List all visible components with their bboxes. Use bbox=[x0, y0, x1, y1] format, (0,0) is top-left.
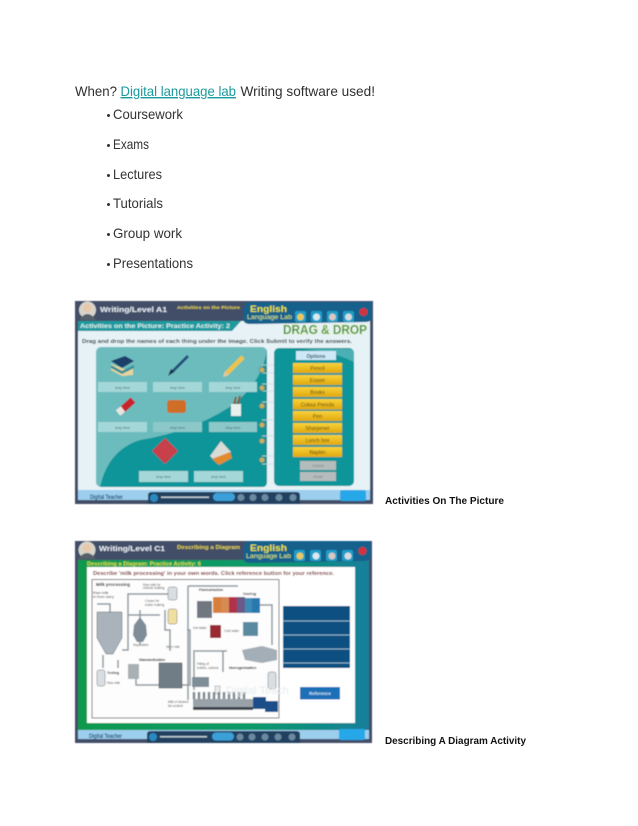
milk processing diagram: in from dairy bbox=[93, 595, 114, 599]
header: writing level C1 bbox=[78, 542, 241, 559]
options panel bbox=[274, 348, 354, 486]
icon: pen bbox=[168, 356, 188, 376]
milk processing diagram: Cooling bbox=[243, 592, 256, 596]
footer player bar bbox=[75, 490, 373, 504]
header: writing level A1: Writing/Level A1 bbox=[100, 305, 167, 314]
options panel: Reset bbox=[313, 475, 323, 479]
reference button: Reference bbox=[309, 691, 331, 696]
bullet list: Tutorials bbox=[113, 195, 163, 211]
milk processing diagram: Raw milk for bbox=[143, 583, 161, 587]
footer player bar bbox=[75, 729, 372, 743]
activity title bar: Activities on the Picture: Practice Activity: 2 bbox=[80, 324, 231, 330]
milk processing diagram: Cold water bbox=[224, 629, 240, 633]
reference button bbox=[300, 687, 340, 700]
milk bottles bbox=[97, 587, 276, 689]
icon: books bbox=[111, 356, 134, 376]
heading line bbox=[75, 83, 375, 99]
picture panel bbox=[96, 347, 267, 487]
icon: colour pencils bbox=[231, 396, 241, 416]
milk processing diagram: Standardization bbox=[139, 658, 165, 662]
options panel: Pen bbox=[313, 414, 322, 420]
pasteurisation units bbox=[197, 601, 212, 618]
milk processing diagram: Homogenisation bbox=[229, 666, 256, 670]
bullet list: Presentations bbox=[113, 255, 193, 271]
activity title: Describing a Diagram: Practice Activity: 6 bbox=[87, 562, 201, 568]
milk processing diagram: Separation bbox=[133, 643, 149, 647]
footer player bar: Digital Teacher bbox=[90, 495, 124, 501]
milk processing diagram: Testing bbox=[107, 671, 119, 675]
milk processing diagram: butter making bbox=[145, 603, 165, 607]
options panel: Lunch box bbox=[306, 438, 330, 444]
watermark: Digital Teach bbox=[226, 685, 289, 697]
options panel: Options bbox=[307, 354, 326, 360]
milk processing diagram: Cream for bbox=[145, 599, 160, 603]
header: writing level C1: Writing/Level C1 bbox=[99, 544, 165, 553]
answer text box bbox=[283, 606, 350, 668]
pipes bbox=[97, 586, 272, 700]
milk processing diagram: Pasteurisation bbox=[199, 588, 223, 592]
options panel: Pencil bbox=[310, 366, 325, 372]
green activity frame bbox=[78, 560, 369, 731]
drop boxes: drop here bbox=[115, 426, 130, 430]
white work area bbox=[87, 567, 355, 723]
caption: describing a diagram: Describing A Diagram Activity bbox=[385, 735, 526, 747]
standardization units bbox=[128, 664, 139, 679]
instruction: Drag and drop the names of each thing under the image. Click Submit to verify the answers. bbox=[82, 339, 352, 345]
drop boxes: drop here bbox=[170, 426, 185, 430]
milk processing diagram: cheese making bbox=[143, 586, 165, 590]
bullet list: Exams bbox=[113, 136, 149, 152]
holding tank bbox=[97, 612, 122, 654]
milk processing diagram: Hot water bbox=[193, 626, 208, 630]
heading line: Digital language lab bbox=[120, 83, 236, 99]
options panel: Books bbox=[310, 390, 325, 396]
screenshot: describing a diagram bbox=[75, 541, 372, 743]
bullet list: Group work bbox=[113, 225, 183, 241]
english language lab logo: Language Lab bbox=[246, 553, 291, 560]
bullet list bbox=[107, 106, 193, 271]
header: writing level C1: Describing a Diagram bbox=[177, 545, 241, 551]
separator bbox=[133, 617, 147, 642]
english language lab logo: English bbox=[250, 543, 287, 554]
english language lab logo bbox=[243, 302, 372, 324]
binder rings bbox=[259, 365, 281, 464]
packaging conveyor bbox=[193, 692, 253, 710]
header: writing level A1: Activities on the Picture bbox=[177, 305, 241, 310]
options panel: Eraser bbox=[310, 378, 325, 384]
bullet list: Lectures bbox=[113, 166, 162, 182]
english language lab logo bbox=[243, 541, 371, 563]
options panel: Submit bbox=[313, 464, 323, 468]
drop boxes: drop here bbox=[226, 386, 241, 390]
drop boxes: drop here bbox=[226, 426, 241, 430]
homogenisation machine bbox=[242, 646, 277, 663]
milk processing diagram: Skim milk bbox=[166, 645, 180, 649]
milk processing diagram: Milk processing bbox=[96, 582, 130, 587]
milk processing diagram: Raw milk bbox=[107, 681, 120, 685]
milk processing diagram: Raw milk bbox=[93, 591, 109, 595]
drop boxes: drop here bbox=[170, 386, 185, 390]
drop boxes: drop here bbox=[211, 475, 226, 479]
instruction: Describe 'milk processing' in your own words. Click reference button for your reference. bbox=[93, 571, 334, 577]
milk processing diagram: Milk of desired bbox=[168, 700, 189, 704]
header: writing level A1 bbox=[79, 302, 241, 320]
options panel: Napkin bbox=[309, 450, 326, 456]
milk processing diagram: fat content bbox=[168, 704, 183, 708]
milk processing diagram bbox=[92, 580, 279, 718]
english language lab logo: Language Lab bbox=[247, 314, 292, 321]
options panel: Sharpener bbox=[305, 426, 330, 432]
caption: activities on the picture: Activities On The Picture bbox=[385, 495, 504, 507]
icon: pencil bbox=[223, 357, 243, 377]
drop boxes: drop here bbox=[115, 386, 130, 390]
milk processing diagram: bottles, cartons bbox=[197, 666, 219, 670]
english language lab logo: English bbox=[250, 304, 287, 315]
heading line: Writing software used! bbox=[240, 83, 375, 99]
options panel: Colour Pencils bbox=[301, 402, 335, 408]
footer player bar: Digital Teacher bbox=[89, 734, 123, 740]
drop boxes: drop here bbox=[156, 475, 171, 479]
drop boxes bbox=[98, 382, 257, 482]
icon: napkin bbox=[152, 438, 178, 464]
filling machine bbox=[192, 677, 209, 687]
milk processing diagram: Filling of bbox=[197, 662, 209, 666]
icon: lunch box bbox=[210, 441, 232, 465]
bullet list: Coursework bbox=[113, 106, 184, 122]
activity title bar bbox=[78, 321, 241, 331]
drag and drop title: DRAG & DROP bbox=[283, 322, 367, 337]
heading line: When? bbox=[75, 83, 117, 99]
milk crates bbox=[253, 697, 278, 712]
screenshot: activities on the picture bbox=[75, 301, 373, 504]
icon: sharpener bbox=[167, 400, 186, 413]
icon: eraser bbox=[118, 400, 133, 413]
